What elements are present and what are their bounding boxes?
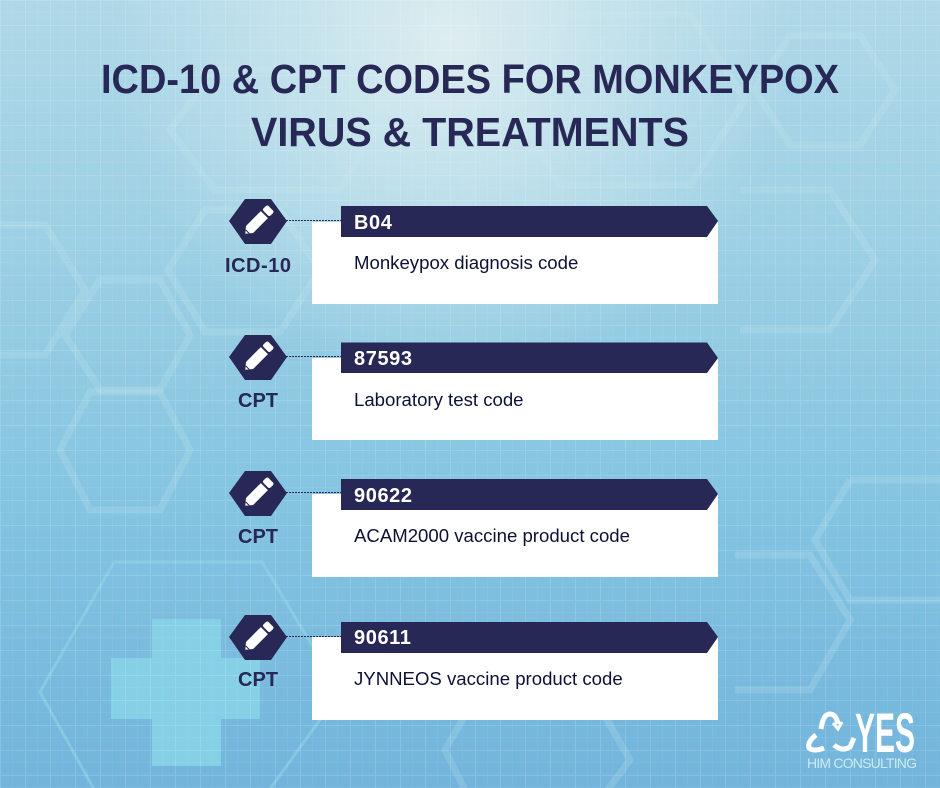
card: B04: B04 [354, 212, 393, 234]
connector [286, 492, 341, 494]
label: CPT: CPT [238, 669, 278, 691]
card: B04 [312, 206, 718, 304]
icon: recycling arrows [809, 714, 854, 750]
title: ICD-10 & CPT CODES FOR MONKEYPOX [101, 56, 839, 102]
card: 90611: 90611 [354, 627, 412, 649]
icon: pencil hexagon [229, 199, 287, 244]
card: 90622: ACAM2000 vaccine product code [354, 525, 630, 546]
icon: pencil hexagon [229, 335, 287, 380]
title: VIRUS & TREATMENTS [251, 109, 689, 155]
label: CPT: CPT [238, 390, 278, 412]
card: 90611: JYNNEOS vaccine product code [354, 668, 623, 689]
connector [286, 636, 341, 638]
card: 90611 [312, 622, 718, 720]
card: 87593 [312, 342, 718, 440]
row: B04 ICD-10 [225, 199, 718, 304]
connector [286, 220, 341, 222]
row: 87593 CPT [229, 335, 718, 440]
card: 87593: Laboratory test code [354, 389, 524, 410]
connector [286, 356, 341, 358]
row: 90611 CPT [229, 615, 718, 720]
icon: pencil hexagon [229, 471, 287, 516]
card: 87593: 87593 [354, 348, 413, 370]
card: 90622: 90622 [354, 485, 413, 507]
row: 90622 CPT [229, 471, 718, 577]
title [101, 56, 839, 155]
card: 90622 [312, 479, 718, 577]
icon: pencil hexagon [229, 615, 287, 660]
label: ICD-10: ICD-10 [225, 255, 291, 277]
tagline: HIM CONSULTING [807, 755, 917, 771]
label: CPT: CPT [238, 526, 278, 548]
card: B04: Monkeypox diagnosis code [354, 252, 578, 273]
logo: YES HIM Consulting [807, 701, 917, 771]
